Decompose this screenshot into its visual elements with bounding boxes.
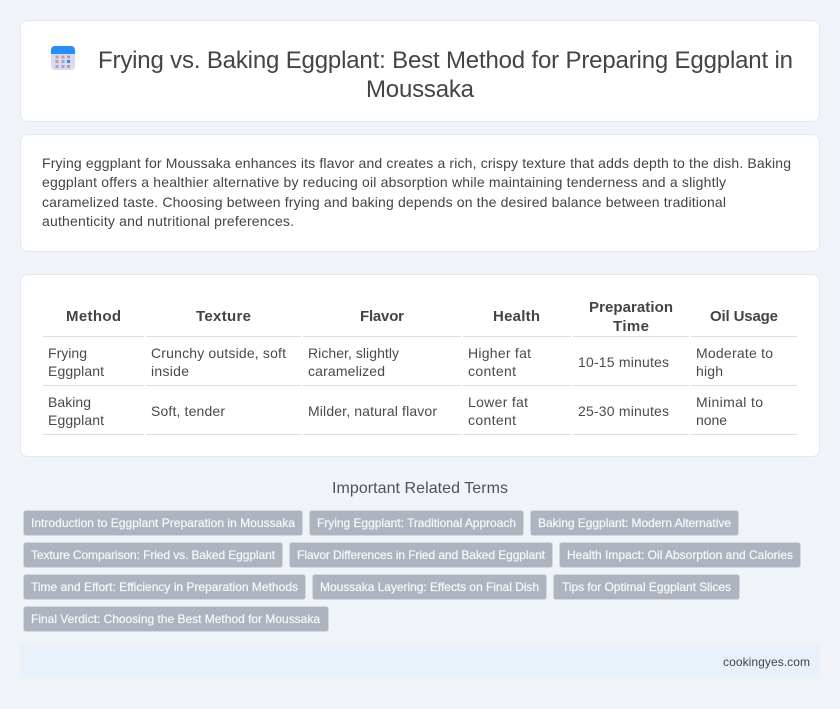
table header: Flavor xyxy=(360,308,404,325)
panel: title header xyxy=(20,20,820,122)
table row: baking eggplant xyxy=(48,394,763,428)
table header: Oil Usage xyxy=(710,308,778,325)
tag xyxy=(530,510,738,536)
text block: introduction: Frying eggplant for Moussaka enhances its flavor and creates a rich, crispy texture that adds depth to the dish. Baking xyxy=(42,155,791,171)
table row: baking eggplant: none xyxy=(696,412,727,428)
table header xyxy=(66,299,778,335)
tag xyxy=(312,574,546,600)
tag xyxy=(24,606,328,632)
table row: frying eggplant: high xyxy=(696,363,723,379)
table row: baking eggplant: Milder, natural flavor xyxy=(308,403,437,419)
tag xyxy=(24,510,302,536)
text block: introduction: eggplant offers a healthier alternative by reducing oil absorption while maintaining tenderness and a slightly xyxy=(42,174,726,190)
tag: Time and Effort: Efficiency in Preparation Methods xyxy=(31,580,298,594)
footer xyxy=(20,645,820,679)
table row: baking eggplant: content xyxy=(468,412,516,428)
title: Moussaka xyxy=(366,76,475,103)
tag: Moussaka Layering: Effects on Final Dish xyxy=(320,580,539,594)
panel: introduction xyxy=(20,134,820,252)
tag xyxy=(560,542,800,568)
table row: frying eggplant: 10-15 minutes xyxy=(578,354,669,370)
tag: Texture Comparison: Fried vs. Baked Eggplant xyxy=(31,548,276,562)
tag xyxy=(310,510,524,536)
tag xyxy=(24,542,282,568)
table row: baking eggplant: Minimal to xyxy=(696,394,763,410)
footer: cookingyes.com xyxy=(723,655,810,669)
tag xyxy=(290,542,552,568)
tag: Final Verdict: Choosing the Best Method for Moussaka xyxy=(31,612,320,626)
text block: introduction xyxy=(42,155,791,229)
table row: frying eggplant: caramelized xyxy=(308,363,385,379)
tag: Frying Eggplant: Traditional Approach xyxy=(317,516,516,530)
table row: frying eggplant xyxy=(48,345,773,379)
table header: Texture xyxy=(196,308,251,325)
tag: Introduction to Eggplant Preparation in Moussaka xyxy=(31,516,295,530)
table row: frying eggplant: Higher fat xyxy=(468,345,531,361)
table row: frying eggplant: Moderate to xyxy=(696,345,773,361)
title xyxy=(98,47,793,103)
table row: frying eggplant: Richer, slightly xyxy=(308,345,399,361)
table row: frying eggplant: content xyxy=(468,363,516,379)
table row: baking eggplant: Soft, tender xyxy=(151,403,225,419)
table row: frying eggplant: Crunchy outside, soft xyxy=(151,345,286,361)
tag: Tips for Optimal Eggplant Slices xyxy=(562,580,731,594)
panel: comparison table xyxy=(20,274,820,456)
table row: frying eggplant: Frying xyxy=(48,345,87,361)
table row: baking eggplant: Lower fat xyxy=(468,394,528,410)
table header: Method xyxy=(66,308,121,325)
table row: baking eggplant: Eggplant xyxy=(48,412,104,428)
related terms tags xyxy=(24,510,800,632)
icon: calendar xyxy=(51,46,75,70)
table header: Preparation xyxy=(589,299,673,316)
table row: baking eggplant: Baking xyxy=(48,394,91,410)
heading: related terms: Important Related Terms xyxy=(332,480,508,497)
tag xyxy=(554,574,740,600)
table row: frying eggplant: inside xyxy=(151,363,189,379)
text block: introduction: caramelized taste. Choosing between frying and baking depends on the desired balance between traditional xyxy=(42,194,726,210)
tag xyxy=(24,574,306,600)
table header: Time xyxy=(613,318,649,335)
table rules xyxy=(43,336,797,435)
title: Frying vs. Baking Eggplant: Best Method for Preparing Eggplant in xyxy=(98,47,793,74)
tag: Flavor Differences in Fried and Baked Eggplant xyxy=(297,548,546,562)
text block: introduction: authenticity and nutritional preferences. xyxy=(42,213,294,229)
tag: Health Impact: Oil Absorption and Calories xyxy=(567,548,793,562)
table row: baking eggplant: 25-30 minutes xyxy=(578,403,669,419)
tag: Baking Eggplant: Modern Alternative xyxy=(538,516,731,530)
table header: Health xyxy=(493,308,540,325)
table row: frying eggplant: Eggplant xyxy=(48,363,104,379)
